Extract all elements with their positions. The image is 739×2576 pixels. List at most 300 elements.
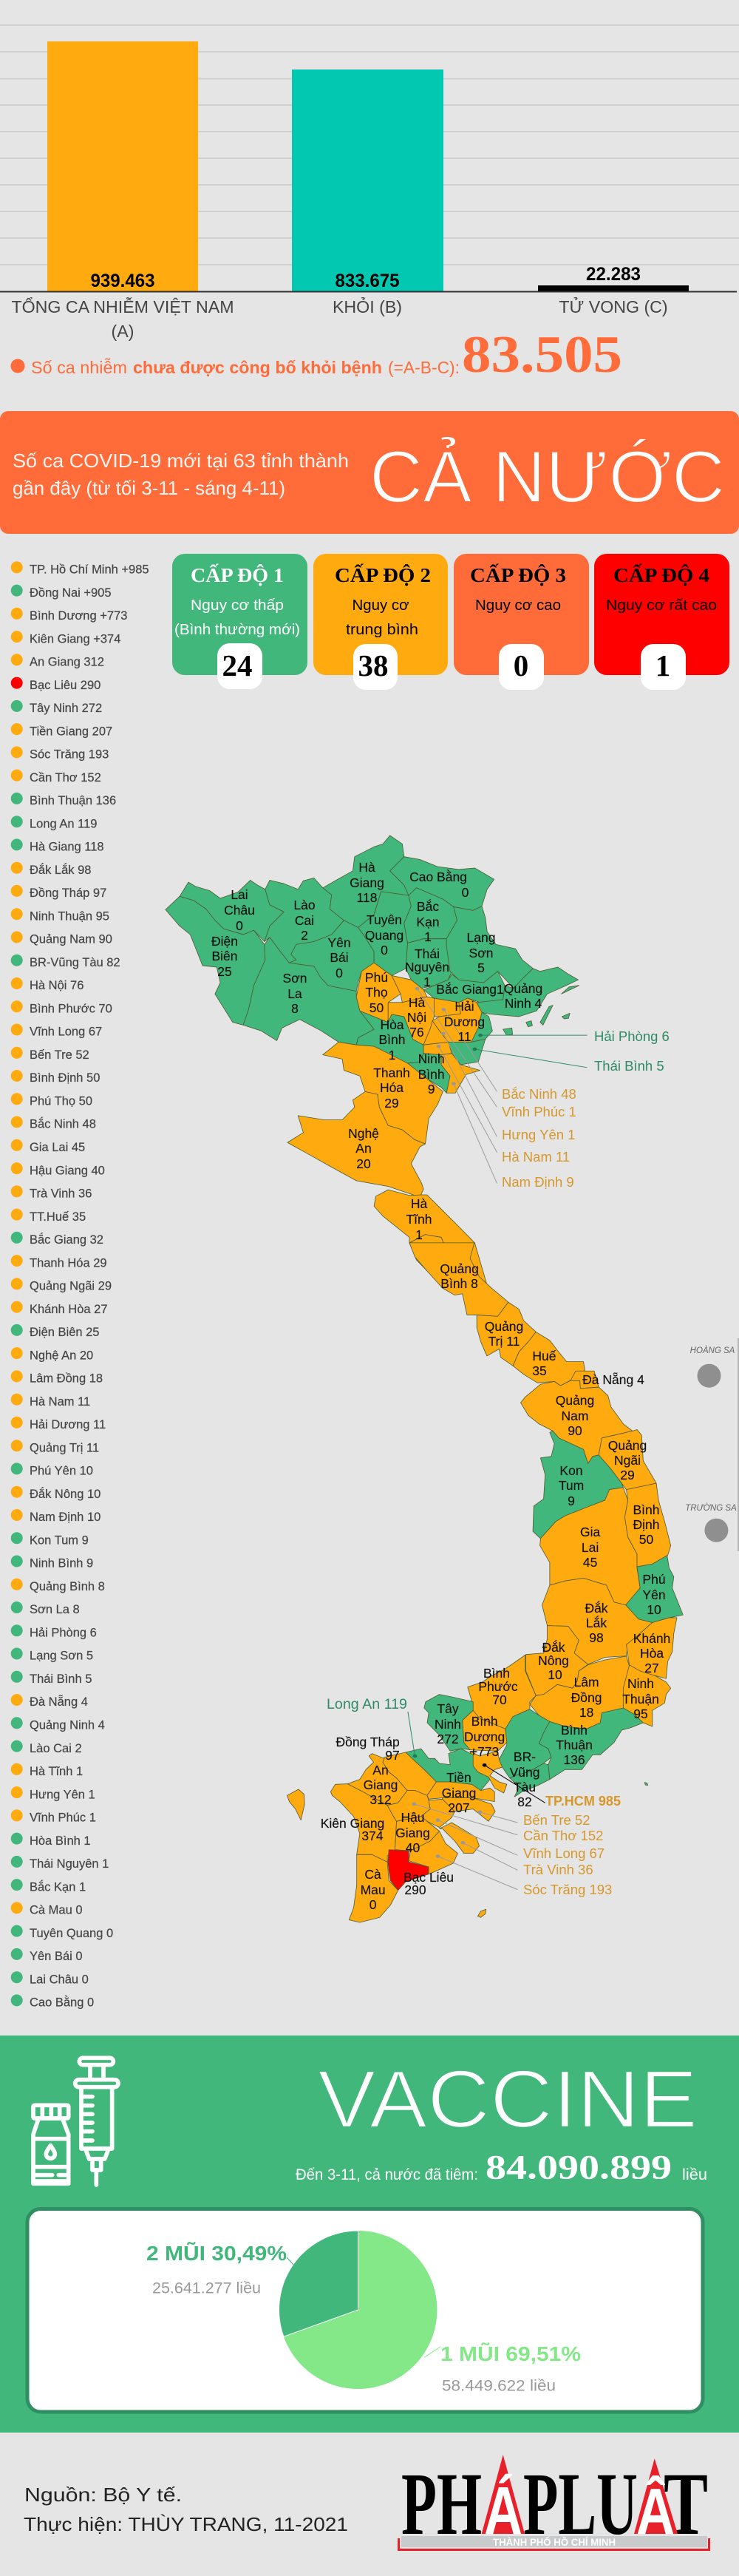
map label: Sơn La: Sơn [283, 971, 307, 986]
label: 1 dose: 58.449.622 liều [442, 2378, 556, 2395]
map of Vietnam [166, 835, 683, 1922]
pie chart [279, 2231, 437, 2389]
row: Yên Bái [11, 1948, 83, 1963]
bar: deaths [538, 285, 689, 291]
card: level 3 [454, 554, 589, 690]
map label: Lai Châu: 0 [236, 918, 243, 933]
row: Bình Thuận: Bình Thuận 136 [30, 794, 116, 807]
map label: Lạng Sơn: Sơn [469, 946, 493, 960]
map label: Hà Giang: Giang [350, 875, 384, 890]
row: Tiền Giang: Tiền Giang 207 [30, 725, 112, 738]
map label: Điện Biên: 25 [217, 964, 232, 979]
map label: Bình Định: 50 [639, 1532, 653, 1547]
bar chart: totals [0, 25, 739, 341]
map label: Tiền Giang: 207 [448, 1800, 470, 1815]
map label: Bạc Liêu: 290 [404, 1882, 426, 1897]
row: Hải Dương: Hải Dương 11 [30, 1418, 106, 1431]
map label: Lào Cai: 2 [301, 928, 308, 943]
callout: unrecovered cases: chưa được công bố khỏi bệnh [133, 358, 382, 377]
map label: Bắc Kạn: Kạn [416, 915, 440, 929]
map label: Nghệ An: An [355, 1141, 372, 1156]
map label: Đà Nẵng: Đà Nẵng 4 [582, 1372, 644, 1387]
card: level 2: CẤP ĐỘ 2 [335, 563, 431, 586]
logo: Pháp Luật: T [664, 2455, 708, 2554]
map label: Thái Nguyên: Thái [415, 946, 440, 961]
card: level 1: (Bình thường mới) [174, 621, 300, 638]
map label: Lâm Đồng: Đồng [571, 1690, 602, 1705]
row: Khánh Hòa: Khánh Hòa 27 [30, 1303, 108, 1316]
map label: Khánh Hòa: 27 [644, 1661, 659, 1675]
logo: Pháp Luật: PLU [523, 2455, 638, 2554]
map label: Ninh Thuận: 95 [633, 1706, 648, 1721]
axis label: total: (A) [112, 322, 134, 341]
map label: Cà Mau: 0 [370, 1897, 377, 1912]
callout: Hà Nam: Hà Nam 11 [502, 1149, 570, 1165]
row: Thanh Hóa: Thanh Hóa 29 [30, 1256, 107, 1270]
callout: Hưng Yên: Hưng Yên 1 [502, 1127, 575, 1142]
map label: Hải Dương: 11 [457, 1029, 471, 1044]
callout: Nam Định: Nam Định 9 [502, 1174, 574, 1190]
label: 2 doses: 2 MŨI 30,49% [146, 2242, 287, 2265]
callout: Vĩnh Long: Vĩnh Long 67 [523, 1845, 605, 1861]
map label: Quảng Bình: Bình 8 [440, 1276, 478, 1291]
map label: Hậu Giang: Hậu [401, 1810, 425, 1825]
map label: Tiền Giang: Giang [442, 1786, 476, 1800]
row: Lạng Sơn [11, 1647, 93, 1663]
map label: BR-Vũng Tàu: BR- [514, 1749, 536, 1764]
row: Điện Biên: Điện Biên 25 [30, 1326, 99, 1339]
row: Kiên Giang: Kiên Giang +374 [30, 632, 120, 645]
callout: unrecovered cases: Số ca nhiễm [31, 358, 127, 377]
row: Cà Mau [11, 1902, 83, 1917]
row: Hà Nội: Hà Nội 76 [30, 979, 84, 992]
value: total cases: 939.463 [90, 271, 155, 291]
row: Lai Châu: Lai Châu 0 [30, 1973, 89, 1986]
leader lines: northern callouts [415, 987, 588, 1184]
island: Hoàng Sa [690, 1346, 735, 1388]
map label: Kiên Giang: Kiên Giang [321, 1816, 384, 1831]
vaccine total: Đến 3-11, cả nước đã tiêm: [296, 2166, 478, 2183]
map: southern provinces [287, 1655, 671, 1922]
map label: Tiền Giang: Tiền [446, 1770, 471, 1785]
row: Bến Tre: Bến Tre 52 [30, 1048, 89, 1062]
row: Vĩnh Phúc: Vĩnh Phúc 1 [30, 1811, 96, 1825]
row: Đà Nẵng [11, 1694, 88, 1709]
map label: Lào Cai: Cai [295, 913, 314, 928]
map label: Bắc Giang: Bắc Giang1 [436, 981, 504, 997]
map label: Tây Ninh: Ninh [435, 1717, 461, 1732]
map label: Tây Ninh: Tây [437, 1701, 459, 1716]
map label: Nghệ An: Nghệ [348, 1126, 379, 1141]
map label: Phú Yên: Phú [642, 1572, 666, 1587]
row: Nghệ An [11, 1347, 93, 1362]
map label: Hậu Giang: 40 [406, 1840, 420, 1855]
row: Bắc Giang: Bắc Giang 32 [30, 1233, 103, 1247]
icon: syringe and vial [33, 2058, 118, 2185]
row: Bến Tre [11, 1047, 89, 1062]
row: Tuyên Quang: Tuyên Quang 0 [30, 1927, 113, 1940]
footer credits: Nguồn: Bộ Y tế. [24, 2484, 182, 2506]
row: Gia Lai [11, 1139, 85, 1154]
map label: Yên Bái: Yên [327, 935, 351, 950]
map label: Bình Thuận: 136 [563, 1752, 585, 1767]
map label: Phú Yên: Yên [642, 1587, 666, 1602]
card: level 1: CẤP ĐỘ 1 [191, 563, 284, 586]
row: Bạc Liêu: Bạc Liêu 290 [30, 679, 101, 692]
map label: Khánh Hòa: Hòa [640, 1646, 664, 1661]
map label: Bắc Kạn: 1 [424, 929, 432, 944]
map label: Gia Lai: 45 [583, 1555, 597, 1570]
row: Ninh Bình [11, 1556, 93, 1570]
row: Đà Nẵng: Đà Nẵng 4 [30, 1695, 88, 1709]
map label: Gia Lai: Gia [580, 1525, 600, 1539]
map label: Thanh Hóa: 29 [384, 1096, 399, 1111]
row: Quảng Ngãi: Quảng Ngãi 29 [30, 1280, 112, 1293]
map label: Quảng Trị: Quảng [485, 1319, 523, 1334]
row: Ninh Thuận: Ninh Thuận 95 [30, 909, 109, 923]
map label: Cao Bằng: 0 [462, 885, 469, 900]
map label: Cà Mau: Cà [364, 1867, 381, 1882]
map label: Cao Bằng: Cao Bằng [409, 869, 467, 884]
row: Hà Nam [11, 1394, 90, 1409]
logo letter: Á [482, 2455, 525, 2549]
row: Quảng Nam: Quảng Nam 90 [30, 933, 112, 946]
row: Yên Bái: Yên Bái 0 [30, 1950, 83, 1963]
row: Lai Châu [11, 1971, 89, 1986]
map label: Quảng Ngãi: 29 [620, 1468, 635, 1482]
banner subtitle: Số ca COVID-19 mới tại 63 tỉnh thành [13, 450, 349, 472]
map label: Kon Tum: 9 [568, 1494, 575, 1508]
row: Bắc Kạn: Bắc Kạn 1 [30, 1880, 86, 1894]
axis label: recovered: KHỎI (B) [333, 296, 402, 316]
row: Hòa Bình: Hòa Bình 1 [30, 1834, 91, 1848]
map label: Đồng Tháp: 97 [385, 1748, 400, 1763]
map label: Huế: 35 [532, 1363, 547, 1378]
map label: Ninh Thuận: Ninh [627, 1676, 654, 1691]
logo: Pháp Luật: PH [401, 2455, 482, 2554]
row: Bắc Ninh: Bắc Ninh 48 [30, 1117, 96, 1131]
row: Phú Thọ: Phú Thọ 50 [30, 1094, 92, 1108]
map label: Yên Bái: Bái [330, 950, 349, 965]
row: Hải Phòng [11, 1624, 97, 1640]
row: Cao Bằng: Cao Bằng 0 [30, 1996, 94, 2010]
map label: Sơn La: 8 [291, 1001, 299, 1016]
card: level 4: 1 [655, 648, 670, 682]
map label: An Giang: 312 [370, 1792, 392, 1807]
map label: Đắk Nông: 10 [548, 1667, 562, 1682]
vaccine total [296, 2149, 707, 2187]
map label: Quảng Ngãi: Ngãi [614, 1453, 641, 1468]
map label: Đắk Lắk: Đắk [585, 1600, 608, 1616]
map label: Quảng Ngãi: Quảng [608, 1438, 647, 1453]
map label: Phú Thọ: Phú [365, 970, 388, 985]
panel: nationwide banner [0, 411, 739, 534]
row: Phú Yên [11, 1462, 93, 1478]
row: Thái Bình: Thái Bình 5 [30, 1672, 92, 1686]
map label: Phú Yên: 10 [647, 1602, 661, 1617]
map label: Gia Lai: Lai [582, 1540, 599, 1555]
row: Sóc Trăng: Sóc Trăng 193 [30, 748, 109, 762]
row: Đắk Lắk [11, 862, 91, 877]
map label: Bình Phước: 70 [492, 1692, 507, 1707]
map label: Bình Định: Bình [633, 1502, 659, 1517]
bar: total cases [47, 41, 198, 291]
map label: Lâm Đồng: Lâm [574, 1675, 599, 1689]
map label: BR-Vũng Tàu: Vũng [510, 1765, 539, 1780]
map label: Hà Nội: Hà [409, 995, 425, 1010]
banner subtitle: gần đây (từ tối 3-11 - sáng 4-11) [13, 477, 285, 499]
footer credits [24, 2484, 348, 2535]
map label: Bình Dương: Dương [464, 1729, 505, 1744]
map label: Hải Dương: Dương [444, 1014, 485, 1029]
row: Trà Vinh [11, 1185, 92, 1201]
map label: Kon Tum: Kon [559, 1463, 583, 1478]
map label: Bình Định: Định [633, 1517, 659, 1532]
row: Kon Tum: Kon Tum 9 [30, 1533, 89, 1547]
vaccine total: 84.090.899 [486, 2149, 672, 2187]
map label: Bình Dương: Bình [471, 1714, 498, 1729]
map label: Ninh Bình: 9 [428, 1082, 435, 1097]
callout: Sóc Trăng: Sóc Trăng 193 [523, 1882, 612, 1897]
label: 1 dose: 1 MŨI 69,51% [440, 2342, 581, 2365]
row: Lào Cai: Lào Cai 2 [30, 1742, 82, 1755]
row: Cà Mau: Cà Mau 0 [30, 1904, 83, 1917]
map label: Thanh Hóa: Thanh [373, 1065, 410, 1080]
map label: Hà Nội: Nội [407, 1010, 426, 1025]
map label: Phú Thọ: Thọ [365, 985, 388, 1000]
row: Đồng Tháp: Đồng Tháp 97 [30, 887, 106, 900]
row: TP. Hồ Chí Minh: TP. Hồ Chí Minh +985 [30, 563, 149, 577]
map label: Thái Nguyên: 1 [423, 975, 431, 989]
islands inset: Hoàng Sa and Trường Sa [685, 1338, 738, 1551]
map: central provinces [409, 1243, 683, 1695]
map label: Đồng Tháp: Đồng Tháp [336, 1735, 400, 1749]
row: Trà Vinh: Trà Vinh 36 [30, 1187, 92, 1201]
row: Sơn La: Sơn La 8 [30, 1603, 80, 1616]
row: Hà Tĩnh: Hà Tĩnh 1 [30, 1765, 83, 1778]
map label: Hà Tĩnh: Hà [411, 1196, 427, 1211]
leader lines: southern callouts [408, 1712, 545, 1890]
callout: unrecovered cases [10, 326, 622, 384]
map label: Tuyên Quang: Quang [365, 928, 403, 943]
callout: Bắc Ninh: Bắc Ninh 48 [502, 1086, 576, 1102]
map label: Kon Tum: Tum [559, 1478, 584, 1493]
row: Ninh Bình: Ninh Bình 9 [30, 1557, 93, 1570]
logo tagline: THÀNH PHỐ HỒ CHÍ MINH [493, 2537, 616, 2548]
row: TT.Huế: TT.Huế 35 [30, 1210, 86, 1224]
row: Bình Định: Bình Định 50 [30, 1071, 100, 1085]
map label: BR-Vũng Tàu: 82 [517, 1794, 532, 1809]
map label: Tây Ninh: 272 [437, 1732, 459, 1746]
map label: Tuyên Quang: Tuyên [367, 912, 402, 927]
callout: Trà Vinh: Trà Vinh 36 [523, 1862, 593, 1877]
map label: Nghệ An: 20 [356, 1156, 371, 1171]
card: level 1: Nguy cơ thấp [191, 597, 284, 614]
vaccine total: liều [682, 2166, 707, 2183]
map: northern provinces [166, 835, 579, 1285]
banner heading: CẢ NƯỚC [370, 435, 725, 518]
map label: Hậu Giang: Giang [395, 1826, 430, 1840]
row: Hưng Yên [11, 1786, 95, 1801]
label: 2 doses: 25.641.277 liều [152, 2280, 261, 2297]
row: Lào Cai [11, 1741, 82, 1755]
callout: unrecovered cases: 83.505 [462, 326, 622, 384]
callout: Hải Phòng: Hải Phòng 6 [594, 1028, 670, 1044]
card: level 3: CẤP ĐỘ 3 [470, 563, 566, 586]
map label: Lào Cai: Lào [293, 898, 316, 912]
row: Quảng Trị: Quảng Trị 11 [30, 1441, 99, 1454]
map label: Kiên Giang: 374 [361, 1828, 384, 1843]
row: Đắk Nông: Đắk Nông 10 [30, 1487, 101, 1501]
panel: vaccine [0, 2036, 739, 2433]
row: Vĩnh Long: Vĩnh Long 67 [30, 1026, 102, 1039]
row: Nghệ An: Nghệ An 20 [30, 1349, 93, 1362]
card: level 2: trung bình [346, 621, 418, 638]
logo letter: Á: Á [484, 2473, 522, 2549]
island: Hoàng Sa: HOÀNG SA [690, 1346, 735, 1355]
row: Phú Yên: Phú Yên 10 [30, 1465, 93, 1478]
value: deaths: 22.283 [586, 264, 641, 285]
map label: Lâm Đồng: 18 [579, 1705, 593, 1720]
map label: Điện Biên: Biên [211, 949, 238, 963]
callout: Long An: Long An 119 [327, 1696, 407, 1712]
island: Trường Sa: TRƯỜNG SA [685, 1503, 737, 1513]
map label: BR-Vũng Tàu: Tàu [514, 1780, 536, 1794]
axis label: total: TỔNG CA NHIỄM VIỆT NAM [11, 296, 234, 316]
map label: Bình Thuận: Thuận [556, 1738, 593, 1752]
map label: An Giang: An [372, 1763, 389, 1777]
row: Lạng Sơn: Lạng Sơn 5 [30, 1650, 93, 1663]
panel: risk level cards [172, 554, 729, 690]
card: level 4: CẤP ĐỘ 4 [613, 563, 709, 586]
map label: Khánh Hòa: Khánh [633, 1631, 670, 1646]
map label: Hà Giang: Hà [358, 860, 375, 875]
map label: Hòa Bình: 1 [389, 1048, 395, 1062]
callout: Vĩnh Phúc: Vĩnh Phúc 1 [502, 1104, 576, 1119]
map label: Quảng Nam: Nam [562, 1409, 588, 1423]
card: level 4: Nguy cơ rất cao [606, 597, 717, 614]
row: Bình Phước: Bình Phước 70 [30, 1002, 112, 1015]
row: Bắc Ninh [11, 1116, 96, 1131]
row: Long An [11, 816, 97, 830]
row: Hà Giang: Hà Giang 118 [30, 841, 104, 854]
map label: Quảng Bình: Quảng [440, 1261, 479, 1276]
row: Bình Dương: Bình Dương +773 [30, 609, 127, 623]
map label: Yên Bái: 0 [336, 966, 343, 980]
callout: Thái Bình: Thái Bình 5 [594, 1058, 664, 1074]
map label: Tuyên Quang: 0 [381, 943, 388, 957]
row: Cần Thơ: Cần Thơ 152 [30, 771, 101, 784]
callout: TP.HCM: TP.HCM 985 [545, 1793, 621, 1809]
row: Thái Nguyên: Thái Nguyên 1 [30, 1857, 109, 1871]
map label: Quảng Ninh: Quảng [504, 981, 542, 996]
row: Cao Bằng [11, 1994, 94, 2010]
map label: Bạc Liêu: Bạc Liêu [403, 1870, 454, 1885]
row: Hà Nội [11, 977, 84, 992]
card: level 1 [172, 554, 307, 689]
callout: Cần Thơ: Cần Thơ 152 [523, 1828, 603, 1843]
map label: Bắc Kạn: Bắc [417, 898, 439, 914]
map label: Hà Nội: 76 [409, 1025, 424, 1040]
row: Hậu Giang: Hậu Giang 40 [30, 1164, 105, 1177]
row: Tây Ninh: Tây Ninh 272 [30, 702, 102, 715]
map label: An Giang: Giang [364, 1777, 398, 1792]
card: level 4 [594, 554, 729, 690]
map label: Bình Phước: Phước [478, 1679, 518, 1694]
map label: Ninh Bình: Bình [418, 1067, 445, 1082]
map label: Hà Tĩnh: 1 [415, 1227, 423, 1242]
map label: Lạng Sơn: 5 [477, 960, 485, 975]
map label: Quảng Nam: Quảng [556, 1393, 594, 1408]
row: Hòa Bình [11, 1833, 91, 1848]
row: Nam Định: Nam Định 10 [30, 1511, 101, 1524]
map label: Đắk Lắk: 98 [589, 1630, 604, 1645]
row: Đồng Nai: Đồng Nai +905 [30, 586, 112, 600]
row: Quảng Bình: Quảng Bình 8 [30, 1580, 105, 1593]
row: Sơn La [11, 1601, 80, 1616]
map label: Ninh Thuận: Thuận [622, 1692, 659, 1706]
map label: Bình Thuận: Bình [561, 1723, 588, 1738]
logo letter: Ậ: Â [636, 2475, 675, 2548]
map label: Hà Giang: 118 [357, 890, 377, 905]
map label: Lai Châu: Châu [224, 903, 255, 918]
map label: Bình Phước: Bình [483, 1666, 510, 1681]
map label: Ninh Bình: Ninh [418, 1051, 445, 1066]
map label: Phú Thọ: 50 [370, 1000, 384, 1015]
callout: Bến Tre: Bến Tre 52 [523, 1812, 590, 1828]
map label: Quảng Nam: 90 [568, 1423, 582, 1438]
map label: Huế: Huế [532, 1349, 556, 1363]
row: Lâm Đồng: Lâm Đồng 18 [30, 1372, 103, 1386]
row: Hải Phòng: Hải Phòng 6 [30, 1627, 97, 1640]
map label: Lai Châu: Lai [231, 887, 248, 902]
pie chart card [27, 2209, 703, 2412]
card: level 2 [313, 554, 448, 690]
row: TT.Huế [11, 1209, 86, 1224]
map label: Điện Biên: Điện [211, 934, 238, 949]
row: Đắk Lắk: Đắk Lắk 98 [30, 863, 91, 877]
map label: Cà Mau: Mau [361, 1882, 386, 1897]
row: Hà Nam: Hà Nam 11 [30, 1395, 90, 1409]
row: Long An: Long An 119 [30, 817, 97, 830]
map label: Quảng Ninh: Ninh 4 [505, 996, 542, 1011]
value: recovered: 833.675 [336, 271, 400, 291]
card: level 1: 24 [222, 648, 253, 682]
map label: Lạng Sơn: Lạng [467, 930, 495, 945]
card: level 3: Nguy cơ cao [475, 597, 561, 614]
map label: Quảng Trị: Trị 11 [488, 1334, 520, 1349]
bar: recovered [292, 70, 443, 291]
map label: Đắk Nông: Đắk [542, 1639, 565, 1655]
row: Hà Tĩnh [11, 1763, 83, 1778]
map label: Hòa Bình: Hòa [380, 1017, 404, 1032]
row: Bắc Kạn [11, 1879, 86, 1894]
map label: Hòa Bình: Bình [378, 1032, 405, 1047]
province ranking list [11, 561, 149, 2010]
map label: Hải Dương: Hải [454, 999, 474, 1014]
card: level 2: 38 [358, 648, 389, 682]
logo: Pháp Luật [399, 2455, 709, 2554]
row: Vĩnh Phúc [11, 1809, 96, 1825]
row: BR-Vũng Tàu: BR-Vũng Tàu 82 [30, 956, 120, 969]
map label: Đắk Lắk: Lắk [586, 1615, 607, 1630]
card: level 3: 0 [514, 648, 528, 682]
row: An Giang: An Giang 312 [30, 655, 104, 668]
map label: Sơn La: La [287, 986, 302, 1001]
label: 1 dose [440, 2342, 581, 2395]
row: Quảng Ninh: Quảng Ninh 4 [30, 1718, 105, 1732]
map label: Thái Nguyên: Nguyên [405, 960, 449, 975]
